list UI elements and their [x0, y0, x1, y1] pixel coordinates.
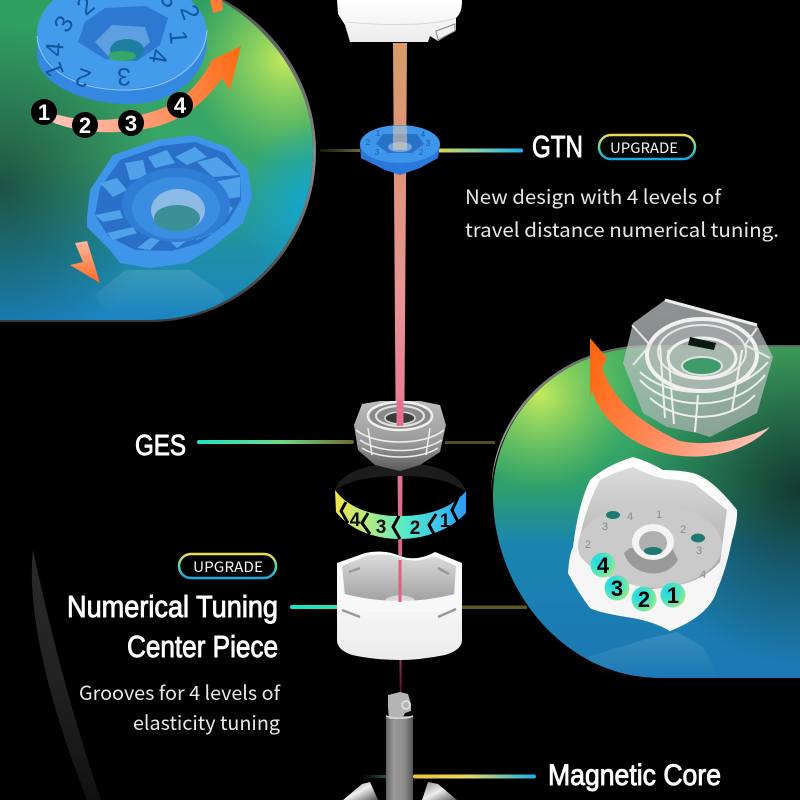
ring numbers: 2	[410, 518, 420, 539]
leader line: GTN left	[320, 149, 360, 152]
holes and hub: 3	[696, 545, 702, 557]
icon: GTN small dial: 2	[419, 148, 424, 157]
text: center piece description	[79, 677, 281, 736]
decorative faint arc bottom left	[32, 550, 101, 800]
holes and hub: 3	[602, 521, 608, 533]
icon: GES clear part	[354, 400, 446, 471]
dial numbers	[39, 0, 205, 93]
holes and hub	[585, 509, 706, 581]
icon: ring back	[335, 463, 466, 492]
leader line: magnetic core left	[363, 775, 387, 778]
holes and hub: 4	[700, 569, 706, 581]
icon: magnetic core	[343, 692, 457, 800]
ring numbers: 4	[350, 510, 361, 531]
panel: GTN detail	[0, 0, 316, 322]
blades	[95, 147, 240, 250]
dial numbers: 4	[143, 47, 173, 66]
leader line: GES right	[445, 441, 495, 444]
icon: GTN small dial: 2	[366, 138, 371, 147]
icon: GTN small dial: 3	[375, 148, 380, 157]
leader line: GTN right	[438, 148, 523, 152]
dial numbers: 3	[117, 62, 131, 90]
arrow: small rotation	[70, 241, 100, 283]
heading: numerical tuning center piece	[67, 589, 278, 664]
arrow: tuning direction	[52, 46, 241, 132]
leader line: center piece right	[462, 606, 527, 609]
icon: upper numbered dial	[37, 0, 207, 104]
leader line: GES left	[197, 440, 354, 444]
panel: center piece detail	[491, 300, 800, 678]
holes and hub: 2	[680, 524, 686, 536]
heading: magnetic core: Magnetic Core	[548, 759, 721, 792]
numbered grooves 1 to 4: 2	[638, 587, 650, 612]
text: GTN description: New design with 4 levels of	[465, 181, 722, 210]
dial numbers: 3	[48, 11, 80, 37]
heading: numerical tuning center piece: Numerical Tuning	[67, 589, 278, 624]
icon: white center piece large	[568, 457, 737, 631]
text: GTN description	[465, 181, 779, 243]
ring numbers: 3	[376, 517, 386, 538]
arrow: rotation direction	[590, 338, 770, 457]
numbered grooves 1 to 4: 4	[597, 553, 610, 578]
numbered steps 1 to 4: 4	[174, 93, 187, 118]
numbered steps 1 to 4: 2	[79, 113, 91, 138]
text: center piece description: elasticity tuning	[133, 707, 280, 736]
icon: lower dial underside	[87, 135, 252, 268]
text: GTN description: travel distance numerical tuning.	[465, 214, 779, 243]
dial numbers: 1	[39, 58, 70, 81]
numbered steps 1 to 4: 3	[125, 111, 137, 136]
numbered grooves 1 to 4: 3	[611, 576, 623, 601]
holes and hub: 2	[585, 539, 591, 551]
badge: upgrade for GTN: UPGRADE	[610, 137, 678, 158]
dial numbers: 2	[72, 62, 95, 93]
holes and hub: 1	[656, 509, 662, 521]
ring separators	[341, 498, 458, 539]
dial numbers: 4	[40, 41, 70, 57]
arrow fragment at top	[210, 0, 223, 13]
icon: clear GES part large	[623, 300, 773, 437]
numbered grooves 1 to 4	[590, 552, 686, 612]
heading: GTN: GTN	[532, 129, 583, 164]
numbered steps 1 to 4: 1	[38, 100, 50, 125]
reflection of white piece	[587, 632, 720, 678]
icon: numbered ring front	[335, 490, 466, 539]
icon: GTN small dial: 1	[376, 129, 381, 138]
laser beam	[393, 43, 407, 695]
leader line: magnetic core right	[413, 774, 536, 778]
icon: GTN small dial	[360, 125, 440, 175]
numbered grooves 1 to 4: 1	[667, 583, 679, 608]
reflection of dial	[95, 270, 225, 316]
text: center piece description: Grooves for 4 levels of	[79, 677, 281, 706]
icon: top white housing	[337, 0, 462, 42]
numbered steps 1 to 4	[31, 92, 193, 138]
icon: GTN small dial: 3	[426, 139, 431, 148]
heading: numerical tuning center piece: Center Piece	[127, 629, 278, 664]
badge: upgrade for center piece	[179, 554, 276, 578]
icon: white center piece	[337, 552, 462, 660]
ring numbers: 1	[440, 511, 451, 532]
icon: GTN small dial: 4	[421, 130, 426, 139]
ring numbers	[350, 510, 451, 539]
dial numbers: 2	[174, 1, 205, 24]
heading: GES: GES	[135, 430, 186, 462]
badge: upgrade for GTN	[599, 135, 695, 159]
holes and hub: 4	[627, 511, 633, 523]
badge: upgrade for center piece: UPGRADE	[193, 556, 263, 577]
dial numbers: 1	[163, 29, 193, 45]
leader line: center piece left	[290, 605, 338, 609]
